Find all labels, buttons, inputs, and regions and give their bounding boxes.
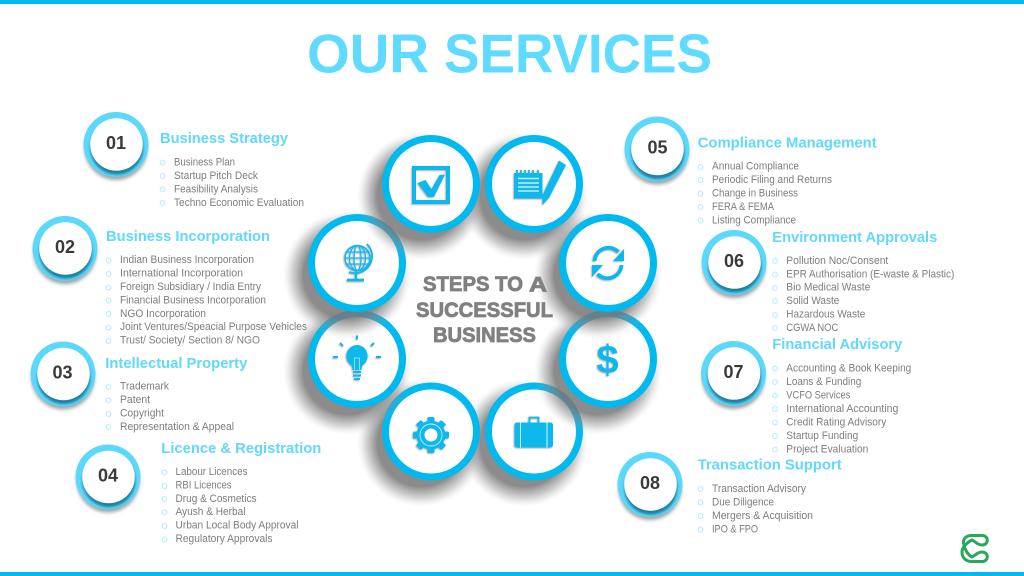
badge 06: 06 bbox=[724, 251, 744, 271]
panel: 01 business strategy bbox=[84, 112, 304, 209]
badge 03 bbox=[30, 342, 96, 410]
list: RBI Licences bbox=[176, 480, 232, 492]
badge 07 bbox=[701, 341, 766, 409]
step: checkbox bbox=[357, 132, 485, 260]
panel: 03 intellectual property bbox=[30, 342, 248, 433]
badge 07: 07 bbox=[723, 362, 744, 382]
list: NGO Incorporation bbox=[120, 308, 206, 320]
list bbox=[106, 254, 307, 346]
badge 05: 05 bbox=[647, 138, 668, 158]
list bbox=[773, 255, 954, 334]
list: Startup Funding bbox=[786, 430, 858, 442]
badge 04 bbox=[76, 444, 140, 512]
list: Loans & Funding bbox=[786, 376, 861, 388]
list: IPO & FPO bbox=[712, 524, 758, 536]
title: SERVICES bbox=[444, 22, 712, 84]
list: Techno Economic Evaluation bbox=[174, 197, 304, 209]
list: Trust/ Society/ Section 8/ NGO bbox=[120, 334, 260, 346]
center text: A bbox=[529, 272, 547, 296]
list: Indian Business Incorporation bbox=[120, 254, 254, 266]
list: Representation & Appeal bbox=[120, 421, 234, 433]
panel: 02 business incorporation bbox=[32, 216, 307, 346]
badge 08: 08 bbox=[640, 473, 660, 493]
list: Periodic Filing and Returns bbox=[712, 174, 832, 186]
heading: Financial Advisory bbox=[772, 336, 903, 353]
list: International Incorporation bbox=[120, 268, 243, 280]
badge 03: 03 bbox=[52, 362, 73, 382]
list bbox=[698, 483, 813, 536]
badge 01: 01 bbox=[106, 133, 126, 153]
list: Business Plan bbox=[174, 156, 235, 168]
panel: 07 financial advisory bbox=[701, 336, 911, 456]
list: Bio Medical Waste bbox=[786, 282, 870, 294]
list: Solid Waste bbox=[786, 295, 839, 307]
list: Due Diligence bbox=[712, 496, 774, 508]
list bbox=[106, 380, 234, 433]
list: Financial Business Incorporation bbox=[120, 294, 266, 306]
step: dollar sign bbox=[534, 307, 662, 435]
badge 06 bbox=[702, 230, 766, 298]
step: globe bbox=[283, 211, 411, 339]
step: notepad and pencil bbox=[460, 132, 588, 260]
step: refresh arrows bbox=[534, 211, 662, 339]
center text: SUCCESSFUL bbox=[416, 298, 553, 322]
center text: BUSINESS bbox=[433, 323, 536, 347]
list: International Accounting bbox=[786, 403, 898, 415]
list: Startup Pitch Deck bbox=[174, 170, 258, 182]
list: Foreign Subsidiary / India Entry bbox=[120, 281, 261, 293]
heading: Compliance Management bbox=[698, 134, 877, 152]
center text: STEPS TO bbox=[423, 272, 523, 296]
list: Annual Compliance bbox=[712, 160, 799, 172]
heading: Business Strategy bbox=[160, 130, 289, 147]
list: Feasibility Analysis bbox=[174, 184, 258, 196]
list: Joint Ventures/Speacial Purpose Vehicles bbox=[120, 321, 307, 333]
title bbox=[307, 22, 712, 84]
step: light bulb bbox=[283, 307, 411, 435]
title: OUR bbox=[307, 22, 429, 84]
list: Regulatory Approvals bbox=[176, 533, 273, 545]
panel: 08 transaction support bbox=[618, 452, 842, 536]
panel: 06 environment approvals bbox=[702, 229, 954, 334]
list: VCFO Services bbox=[786, 390, 851, 402]
step: dollar sign: $ bbox=[596, 338, 619, 382]
badge 05 bbox=[624, 116, 690, 184]
center text bbox=[416, 272, 553, 347]
badge 02 bbox=[32, 216, 98, 284]
list: Hazardous Waste bbox=[786, 308, 865, 320]
list: EPR Authorisation (E-waste & Plastic) bbox=[786, 268, 954, 280]
list: Listing Compliance bbox=[712, 214, 796, 226]
heading: Intellectual Property bbox=[105, 355, 248, 372]
central circle diagram bbox=[283, 132, 662, 507]
list bbox=[773, 362, 911, 456]
step: briefcase bbox=[460, 379, 588, 507]
list bbox=[160, 156, 304, 209]
panel: 05 compliance management bbox=[624, 116, 877, 226]
badge 02: 02 bbox=[55, 237, 75, 257]
list: Labour Licences bbox=[176, 466, 248, 478]
list: Drug & Cosmetics bbox=[176, 493, 257, 505]
badge 08 bbox=[618, 452, 682, 520]
list: Project Evaluation bbox=[786, 444, 868, 456]
list: Change in Business bbox=[712, 188, 798, 200]
top bar bbox=[0, 0, 1024, 4]
list bbox=[162, 466, 298, 545]
badge 01 bbox=[84, 112, 148, 180]
list bbox=[698, 160, 832, 226]
list: Trademark bbox=[120, 380, 169, 392]
list: Mergers & Acquisition bbox=[712, 510, 813, 522]
list: Copyright bbox=[120, 408, 164, 420]
heading: Business Incorporation bbox=[106, 228, 270, 245]
list: Accounting & Book Keeping bbox=[786, 362, 911, 374]
list: Patent bbox=[120, 394, 150, 406]
list: Credit Rating Advisory bbox=[786, 416, 887, 428]
list: CGWA NOC bbox=[786, 322, 838, 334]
heading: Environment Approvals bbox=[772, 229, 937, 246]
heading: Transaction Support bbox=[698, 456, 842, 474]
list: Pollution Noc/Consent bbox=[786, 255, 888, 267]
list: Transaction Advisory bbox=[712, 483, 806, 495]
panel: 04 licence and registration bbox=[76, 440, 321, 545]
badge 04: 04 bbox=[98, 466, 118, 486]
bottom bar bbox=[0, 572, 1024, 576]
list: FERA & FEMA bbox=[712, 201, 775, 213]
heading: Licence & Registration bbox=[161, 440, 321, 457]
list: Urban Local Body Approval bbox=[176, 520, 298, 532]
list: Ayush & Herbal bbox=[176, 506, 246, 518]
icon: green logo bbox=[962, 536, 987, 562]
step: gear bbox=[357, 379, 485, 507]
